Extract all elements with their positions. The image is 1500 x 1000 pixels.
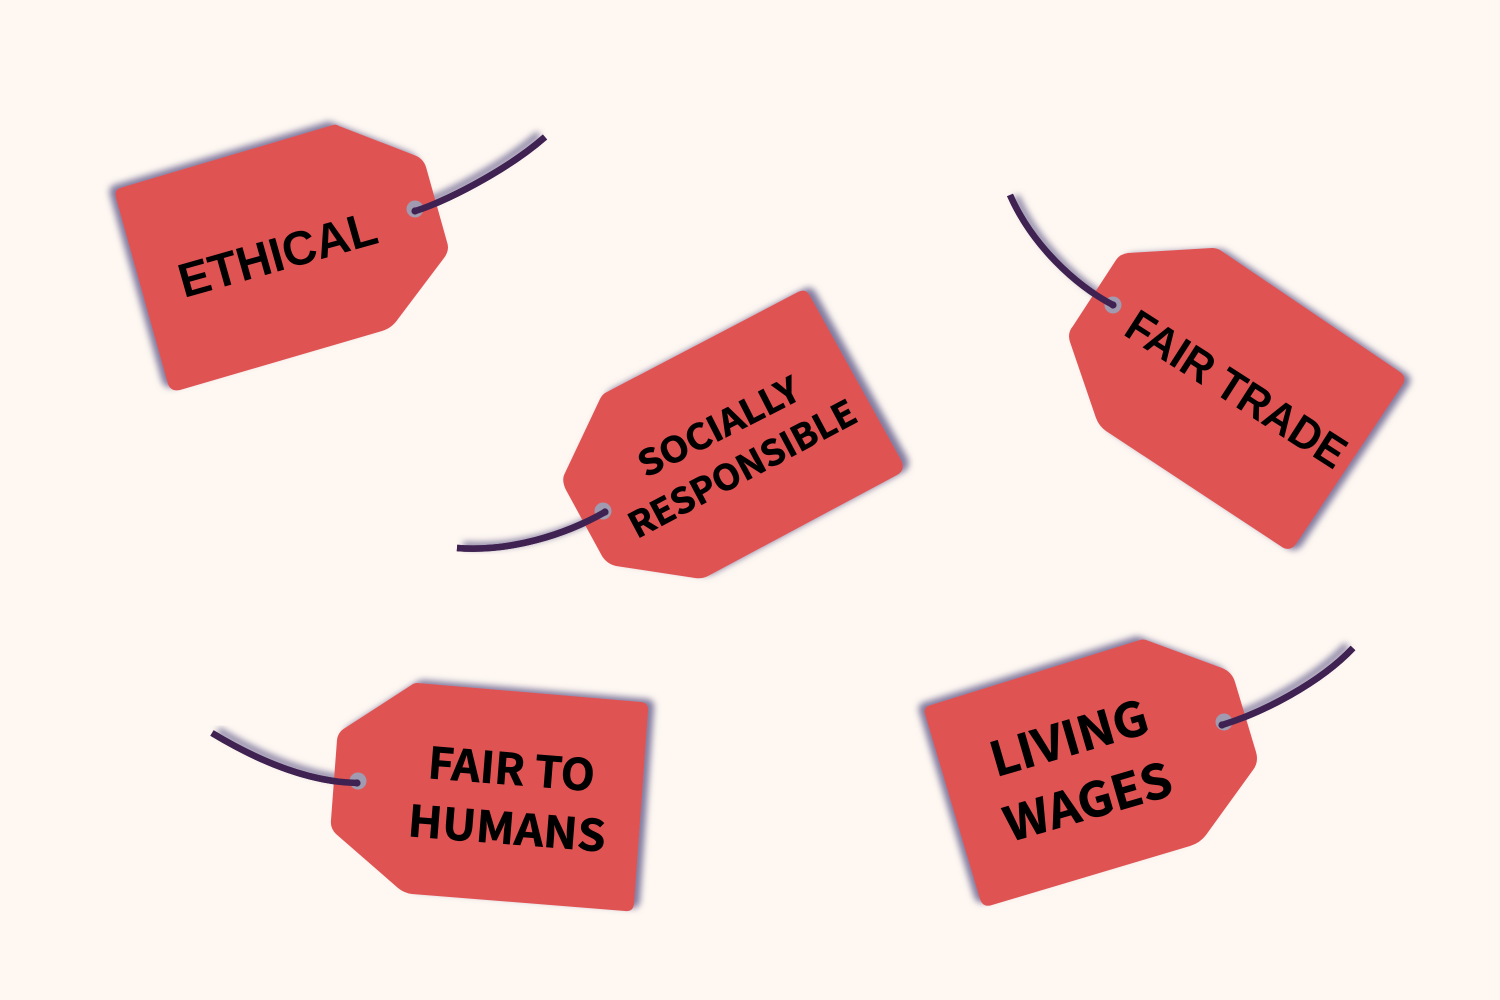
label: fair trade: FAIR TRADE bbox=[1117, 299, 1356, 479]
tag: ethical bbox=[116, 125, 545, 390]
tag: living wages bbox=[925, 640, 1353, 906]
tag: socially responsible bbox=[457, 291, 903, 578]
label: socially responsible: SOCIALLY bbox=[628, 362, 808, 488]
tag: fair to humans bbox=[212, 683, 648, 911]
label: fair to humans: HUMANS bbox=[406, 787, 608, 864]
label: socially responsible: RESPONSIBLE bbox=[618, 385, 865, 549]
label: living wages bbox=[981, 679, 1179, 855]
label: ethical: ETHICAL bbox=[173, 202, 383, 309]
label: living wages: WAGES bbox=[995, 741, 1179, 855]
tag: fair trade bbox=[1010, 195, 1404, 549]
label: living wages: LIVING bbox=[981, 679, 1155, 790]
label: fair to humans bbox=[406, 729, 608, 864]
label: fair to humans: FAIR TO bbox=[426, 729, 597, 804]
